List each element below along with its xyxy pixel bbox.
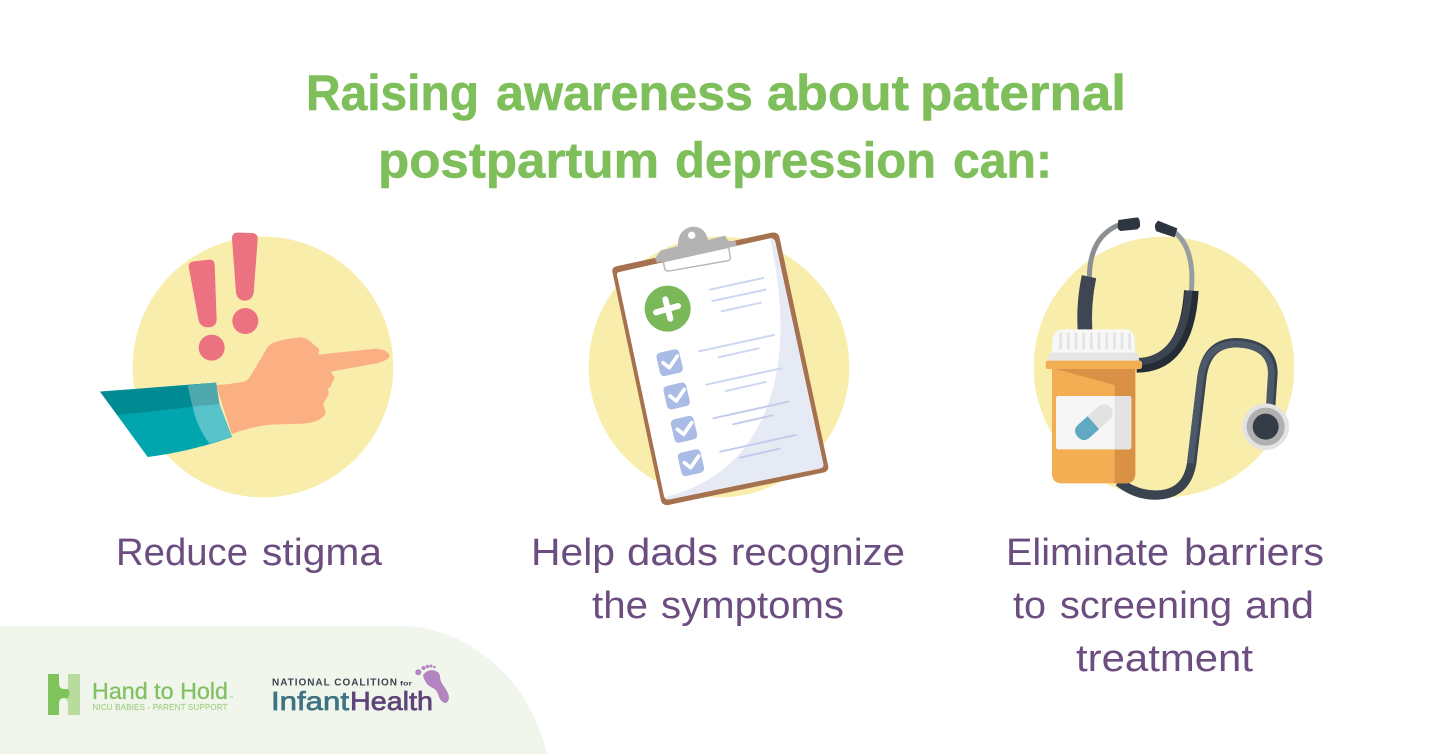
label: eliminate barriers to screening and treatment: Eliminate — [1006, 532, 1169, 574]
title: depression — [675, 132, 936, 188]
panel: help dads recognize — [531, 227, 905, 627]
title: awareness — [496, 65, 753, 121]
title: postpartum — [378, 132, 659, 188]
title: about — [767, 65, 909, 121]
label: eliminate barriers to screening and treatment: treatment — [1076, 638, 1253, 680]
lower tube — [1119, 343, 1273, 495]
logo: National Coalition for Infant Health: for — [400, 682, 413, 688]
plus badge — [645, 286, 691, 332]
clip — [655, 227, 736, 271]
title: can: — [953, 132, 1052, 188]
label: help dads recognize the symptoms: Help — [531, 532, 615, 574]
label: eliminate barriers to screening and treatment: barriers — [1184, 532, 1324, 574]
icon: stethoscope and pill bottle — [1034, 217, 1294, 497]
footer panel — [0, 626, 547, 754]
label: reduce stigma — [116, 532, 383, 574]
logo: Hand to Hold: NICU BABIES - PARENT SUPPORT — [92, 703, 228, 712]
logo: Hand to Hold: ™ — [229, 695, 233, 700]
logo: National Coalition for Infant Health: Health — [350, 686, 433, 716]
label: help dads recognize the symptoms: dads — [627, 532, 718, 574]
label: help dads recognize the symptoms: recognize — [731, 532, 905, 574]
text lines — [699, 278, 796, 458]
logo: National Coalition for Infant Health: Infant — [271, 686, 350, 716]
logo: National Coalition for Infant Health — [271, 664, 449, 716]
icon: pointing hand with exclamation marks — [100, 233, 393, 497]
ear tubes — [1089, 225, 1119, 278]
footprint — [415, 664, 449, 703]
title — [306, 65, 1126, 188]
title: Raising — [306, 65, 479, 121]
logo: Hand to Hold — [48, 674, 233, 715]
label: help dads recognize the symptoms: symptoms — [661, 585, 844, 627]
label: reduce stigma: Reduce — [116, 532, 248, 574]
label: eliminate barriers to screening and treatment: and — [1245, 585, 1314, 627]
logo: Hand to Hold: Hand to Hold — [92, 678, 228, 704]
label: eliminate barriers to screening and treatment: to — [1013, 585, 1046, 627]
logo: National Coalition for Infant Health: NATIONAL COALITION — [272, 678, 397, 688]
title: paternal — [920, 65, 1126, 121]
label: eliminate barriers to screening and treatment — [1006, 532, 1324, 680]
panel: eliminate barriers — [1006, 217, 1324, 680]
panel: reduce stigma — [100, 233, 393, 574]
icon: clipboard checklist — [589, 227, 849, 505]
pill — [1072, 401, 1116, 443]
checkboxes — [656, 348, 705, 477]
label: eliminate barriers to screening and treatment: screening — [1060, 585, 1232, 627]
upper tube — [1137, 291, 1191, 365]
bottle — [1052, 329, 1135, 353]
label: help dads recognize the symptoms: the — [592, 585, 648, 627]
chest piece — [1242, 403, 1289, 450]
label: help dads recognize the symptoms — [531, 532, 905, 627]
label: reduce stigma: stigma — [262, 532, 383, 574]
